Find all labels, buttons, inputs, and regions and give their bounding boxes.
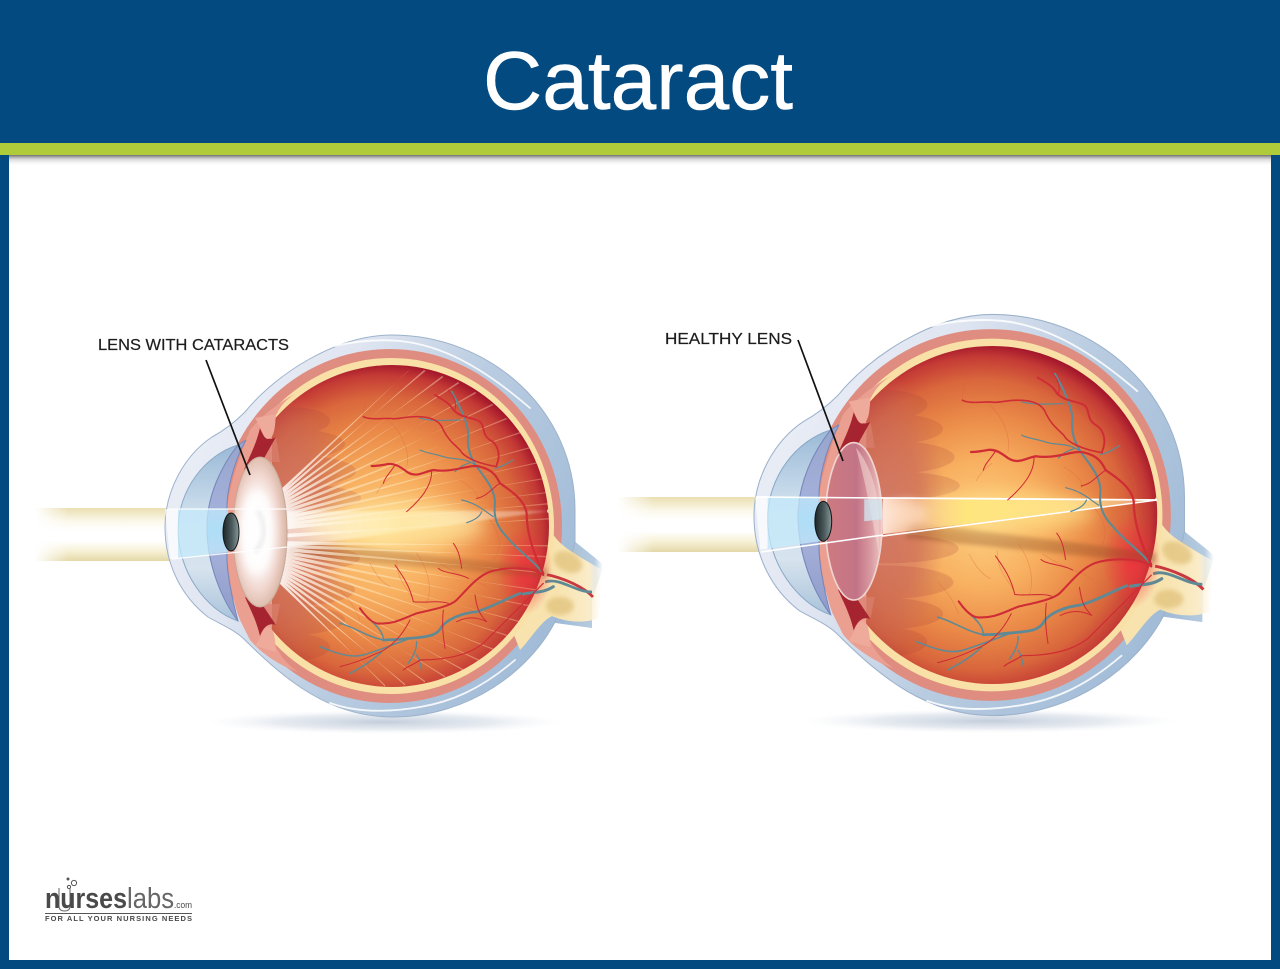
ciliary body <box>837 397 875 647</box>
header banner <box>0 0 1280 143</box>
shadow band <box>290 540 548 578</box>
ground shadow: left eye <box>207 710 563 734</box>
scattered light fan <box>280 370 549 686</box>
lower focused ray <box>761 500 1157 552</box>
title: Cataract <box>483 34 793 127</box>
logo domain: .com <box>174 900 192 910</box>
optic nerve sheath <box>1156 526 1215 622</box>
right eye base <box>754 314 1215 716</box>
clear lens <box>825 443 882 600</box>
cornea and iris <box>768 425 839 615</box>
label: lens with cataracts: LENS WITH CATARACTS <box>98 337 289 354</box>
incoming light beam: left eye <box>35 508 170 561</box>
ciliary body <box>244 414 280 652</box>
logo bubbles <box>67 878 77 889</box>
bottom frame bar <box>0 960 1280 969</box>
sclera highlights <box>330 340 530 711</box>
front ray lines <box>756 497 885 552</box>
soft yellow glow <box>925 494 1095 530</box>
sclera highlights <box>927 320 1137 709</box>
logo: nurseslabs <box>45 878 192 923</box>
cornea and iris <box>178 440 246 621</box>
beam through chamber <box>178 509 228 558</box>
beam through outer cornea <box>165 509 178 559</box>
logo wordmark bold: nurses <box>45 883 127 915</box>
iris root and front tissue <box>227 392 298 672</box>
optic nerve sheath <box>548 536 604 628</box>
choroid <box>218 349 562 703</box>
iris root and front tissue <box>819 374 894 668</box>
label: healthy lens: HEALTHY LENS <box>665 331 792 348</box>
soft central glow <box>305 503 485 547</box>
beam through outer cornea <box>755 497 768 550</box>
ground shadow: right eye <box>802 709 1178 733</box>
ciliary folds <box>219 407 361 661</box>
incoming light beam: right eye <box>618 497 760 552</box>
sclera <box>754 314 1184 716</box>
sclera <box>165 335 575 717</box>
band shadow <box>9 155 1271 165</box>
left frame bar <box>0 155 9 969</box>
pointer line: healthy lens <box>798 340 843 461</box>
focused light wedge <box>883 498 1157 534</box>
pointer line: lens with cataracts <box>206 360 250 475</box>
green accent band <box>0 143 1280 155</box>
logo test tube <box>59 888 70 911</box>
clouded lens <box>233 457 287 607</box>
retina and globe <box>228 358 554 694</box>
logo rule <box>45 913 192 914</box>
optic nerve <box>500 526 602 650</box>
pupil <box>815 501 832 541</box>
central light wedge <box>287 511 549 548</box>
pupil <box>223 513 239 551</box>
right eye with healthy lens <box>754 314 1215 716</box>
right eye front structures <box>755 369 1162 670</box>
ciliary folds <box>811 390 960 657</box>
glare behind lens <box>881 501 929 527</box>
left eye with cataract <box>165 335 604 717</box>
logo wordmark light: labs <box>127 883 174 915</box>
retina and globe <box>820 339 1162 691</box>
right frame bar <box>1271 155 1280 969</box>
retinal vessels <box>320 387 553 673</box>
choroid <box>810 329 1171 701</box>
beam through chamber <box>768 497 820 549</box>
logo tagline: FOR ALL YOUR NURSING NEEDS <box>45 914 192 923</box>
shadow band <box>906 521 1156 563</box>
beam edge lines <box>168 509 287 559</box>
retinal vessels <box>917 369 1162 670</box>
optic nerve <box>1106 515 1213 645</box>
upper focused ray <box>756 497 1157 500</box>
